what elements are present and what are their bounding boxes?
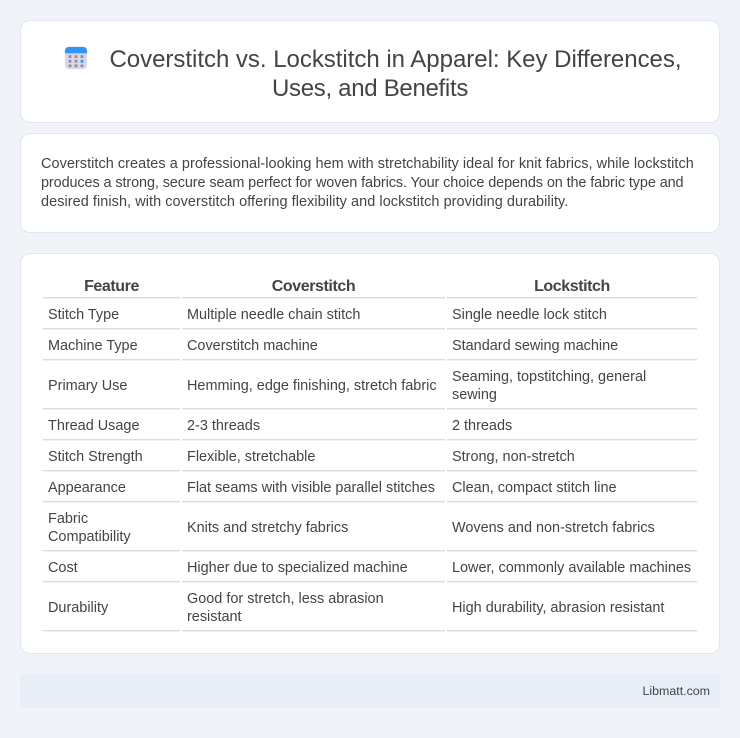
text: Multiple needle chain stitch bbox=[187, 307, 360, 323]
text: Wovens and non-stretch fabrics bbox=[452, 520, 655, 536]
comparison table: Lockstitch bbox=[534, 278, 610, 295]
text: sewing bbox=[452, 387, 497, 403]
text: Stitch Strength bbox=[48, 449, 143, 465]
icon: calendar bbox=[64, 46, 88, 70]
comparison table bbox=[84, 278, 610, 295]
footer bar bbox=[20, 674, 720, 708]
text: Stitch Type bbox=[48, 307, 119, 323]
summary text: produces a strong, secure seam perfect for woven fabrics. Your choice depends on the fabric type and bbox=[41, 175, 683, 191]
title: Uses, and Benefits bbox=[272, 75, 468, 102]
summary text: Coverstitch creates a professional-looking hem with stretchability ideal for knit fabrics, while lockstitch bbox=[41, 156, 694, 172]
row: Primary Use bbox=[48, 369, 646, 403]
title: Coverstitch vs. Lockstitch in Apparel: Key Differences, bbox=[109, 46, 682, 73]
text: Strong, non-stretch bbox=[452, 449, 575, 465]
text: Knits and stretchy fabrics bbox=[187, 520, 348, 536]
text: Higher due to specialized machine bbox=[187, 560, 408, 576]
text: Clean, compact stitch line bbox=[452, 480, 617, 496]
text: Durability bbox=[48, 600, 108, 616]
text: Lower, commonly available machines bbox=[452, 560, 691, 576]
row: Fabric Compatibility bbox=[48, 511, 655, 545]
summary text: desired finish, with coverstitch offering flexibility and lockstitch providing durability. bbox=[41, 194, 568, 210]
text: Hemming, edge finishing, stretch fabric bbox=[187, 378, 437, 394]
text: Single needle lock stitch bbox=[452, 307, 607, 323]
row: Stitch Strength bbox=[48, 449, 575, 465]
text: Coverstitch machine bbox=[187, 338, 318, 354]
row: Machine Type bbox=[48, 338, 618, 354]
panel: title card bbox=[20, 20, 720, 123]
header row bbox=[84, 278, 610, 295]
text: Appearance bbox=[48, 480, 126, 496]
summary text bbox=[41, 156, 694, 210]
text: Fabric bbox=[48, 511, 88, 527]
text: Seaming, topstitching, general bbox=[452, 369, 646, 385]
text: 2 threads bbox=[452, 418, 512, 434]
text: Machine Type bbox=[48, 338, 138, 354]
text: Standard sewing machine bbox=[452, 338, 618, 354]
text: Cost bbox=[48, 560, 78, 576]
panel: summary card bbox=[20, 133, 720, 233]
row: Appearance bbox=[48, 480, 617, 496]
row: Thread Usage bbox=[48, 418, 512, 434]
text: 2-3 threads bbox=[187, 418, 260, 434]
text: Compatibility bbox=[48, 529, 131, 545]
row: Cost bbox=[48, 560, 691, 576]
row: Durability bbox=[48, 591, 664, 625]
text: High durability, abrasion resistant bbox=[452, 600, 664, 616]
text: resistant bbox=[187, 609, 242, 625]
footer credit: Libmatt.com bbox=[643, 684, 710, 698]
text: Primary Use bbox=[48, 378, 127, 394]
row: Stitch Type bbox=[48, 307, 607, 323]
comparison table: Feature bbox=[84, 278, 139, 295]
panel: comparison table card bbox=[20, 253, 720, 654]
text: Flexible, stretchable bbox=[187, 449, 315, 465]
text: Flat seams with visible parallel stitches bbox=[187, 480, 435, 496]
title bbox=[109, 46, 682, 102]
comparison table: Coverstitch bbox=[272, 278, 355, 295]
table rules bbox=[43, 297, 697, 632]
text: Good for stretch, less abrasion bbox=[187, 591, 384, 607]
text: Thread Usage bbox=[48, 418, 140, 434]
